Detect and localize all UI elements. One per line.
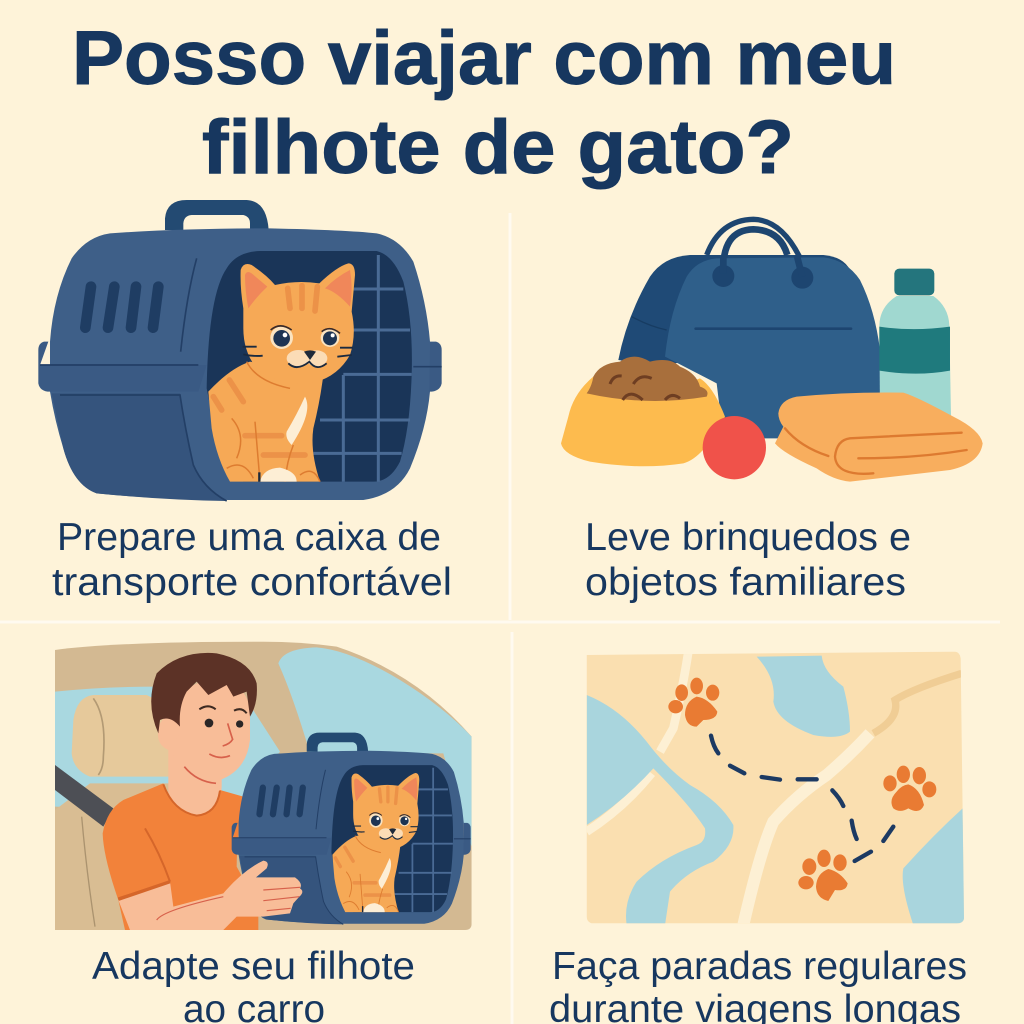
caption: carrier <box>52 516 452 604</box>
title: filhote de gato? <box>202 105 794 190</box>
caption: car <box>92 945 415 1024</box>
title <box>72 16 896 190</box>
icon: red ball <box>703 416 766 479</box>
panel: carrier <box>38 200 452 604</box>
illustration: car interior <box>55 640 473 932</box>
title: Posso viajar com meu <box>72 16 896 101</box>
panel: car <box>55 640 473 1024</box>
icon: paw prints <box>668 678 936 901</box>
man's hand <box>118 861 302 930</box>
man <box>103 653 258 930</box>
illustration: map <box>580 645 970 930</box>
caption: carrier: Prepare uma caixa de <box>57 516 441 559</box>
kitten <box>208 263 355 482</box>
icon: bag <box>618 219 880 438</box>
caption: toys <box>585 516 911 604</box>
icon: food bowl <box>561 357 725 466</box>
caption: carrier: transporte confortável <box>52 561 452 604</box>
caption: map: Faça paradas regulares <box>552 945 967 988</box>
icon: folded blanket <box>775 392 983 482</box>
small carrier <box>232 733 471 924</box>
caption: map <box>549 945 967 1024</box>
caption: toys: Leve brinquedos e <box>585 516 911 559</box>
caption: car: Adapte seu filhote <box>92 945 415 988</box>
dashed route <box>711 736 893 861</box>
icon: pet items <box>561 219 983 482</box>
panel: map <box>549 645 970 1024</box>
icon: carrier with kitten <box>38 200 442 501</box>
icon: water bottle <box>879 269 951 417</box>
panel: toys and items <box>561 219 983 604</box>
caption: toys: objetos familiares <box>585 561 906 604</box>
